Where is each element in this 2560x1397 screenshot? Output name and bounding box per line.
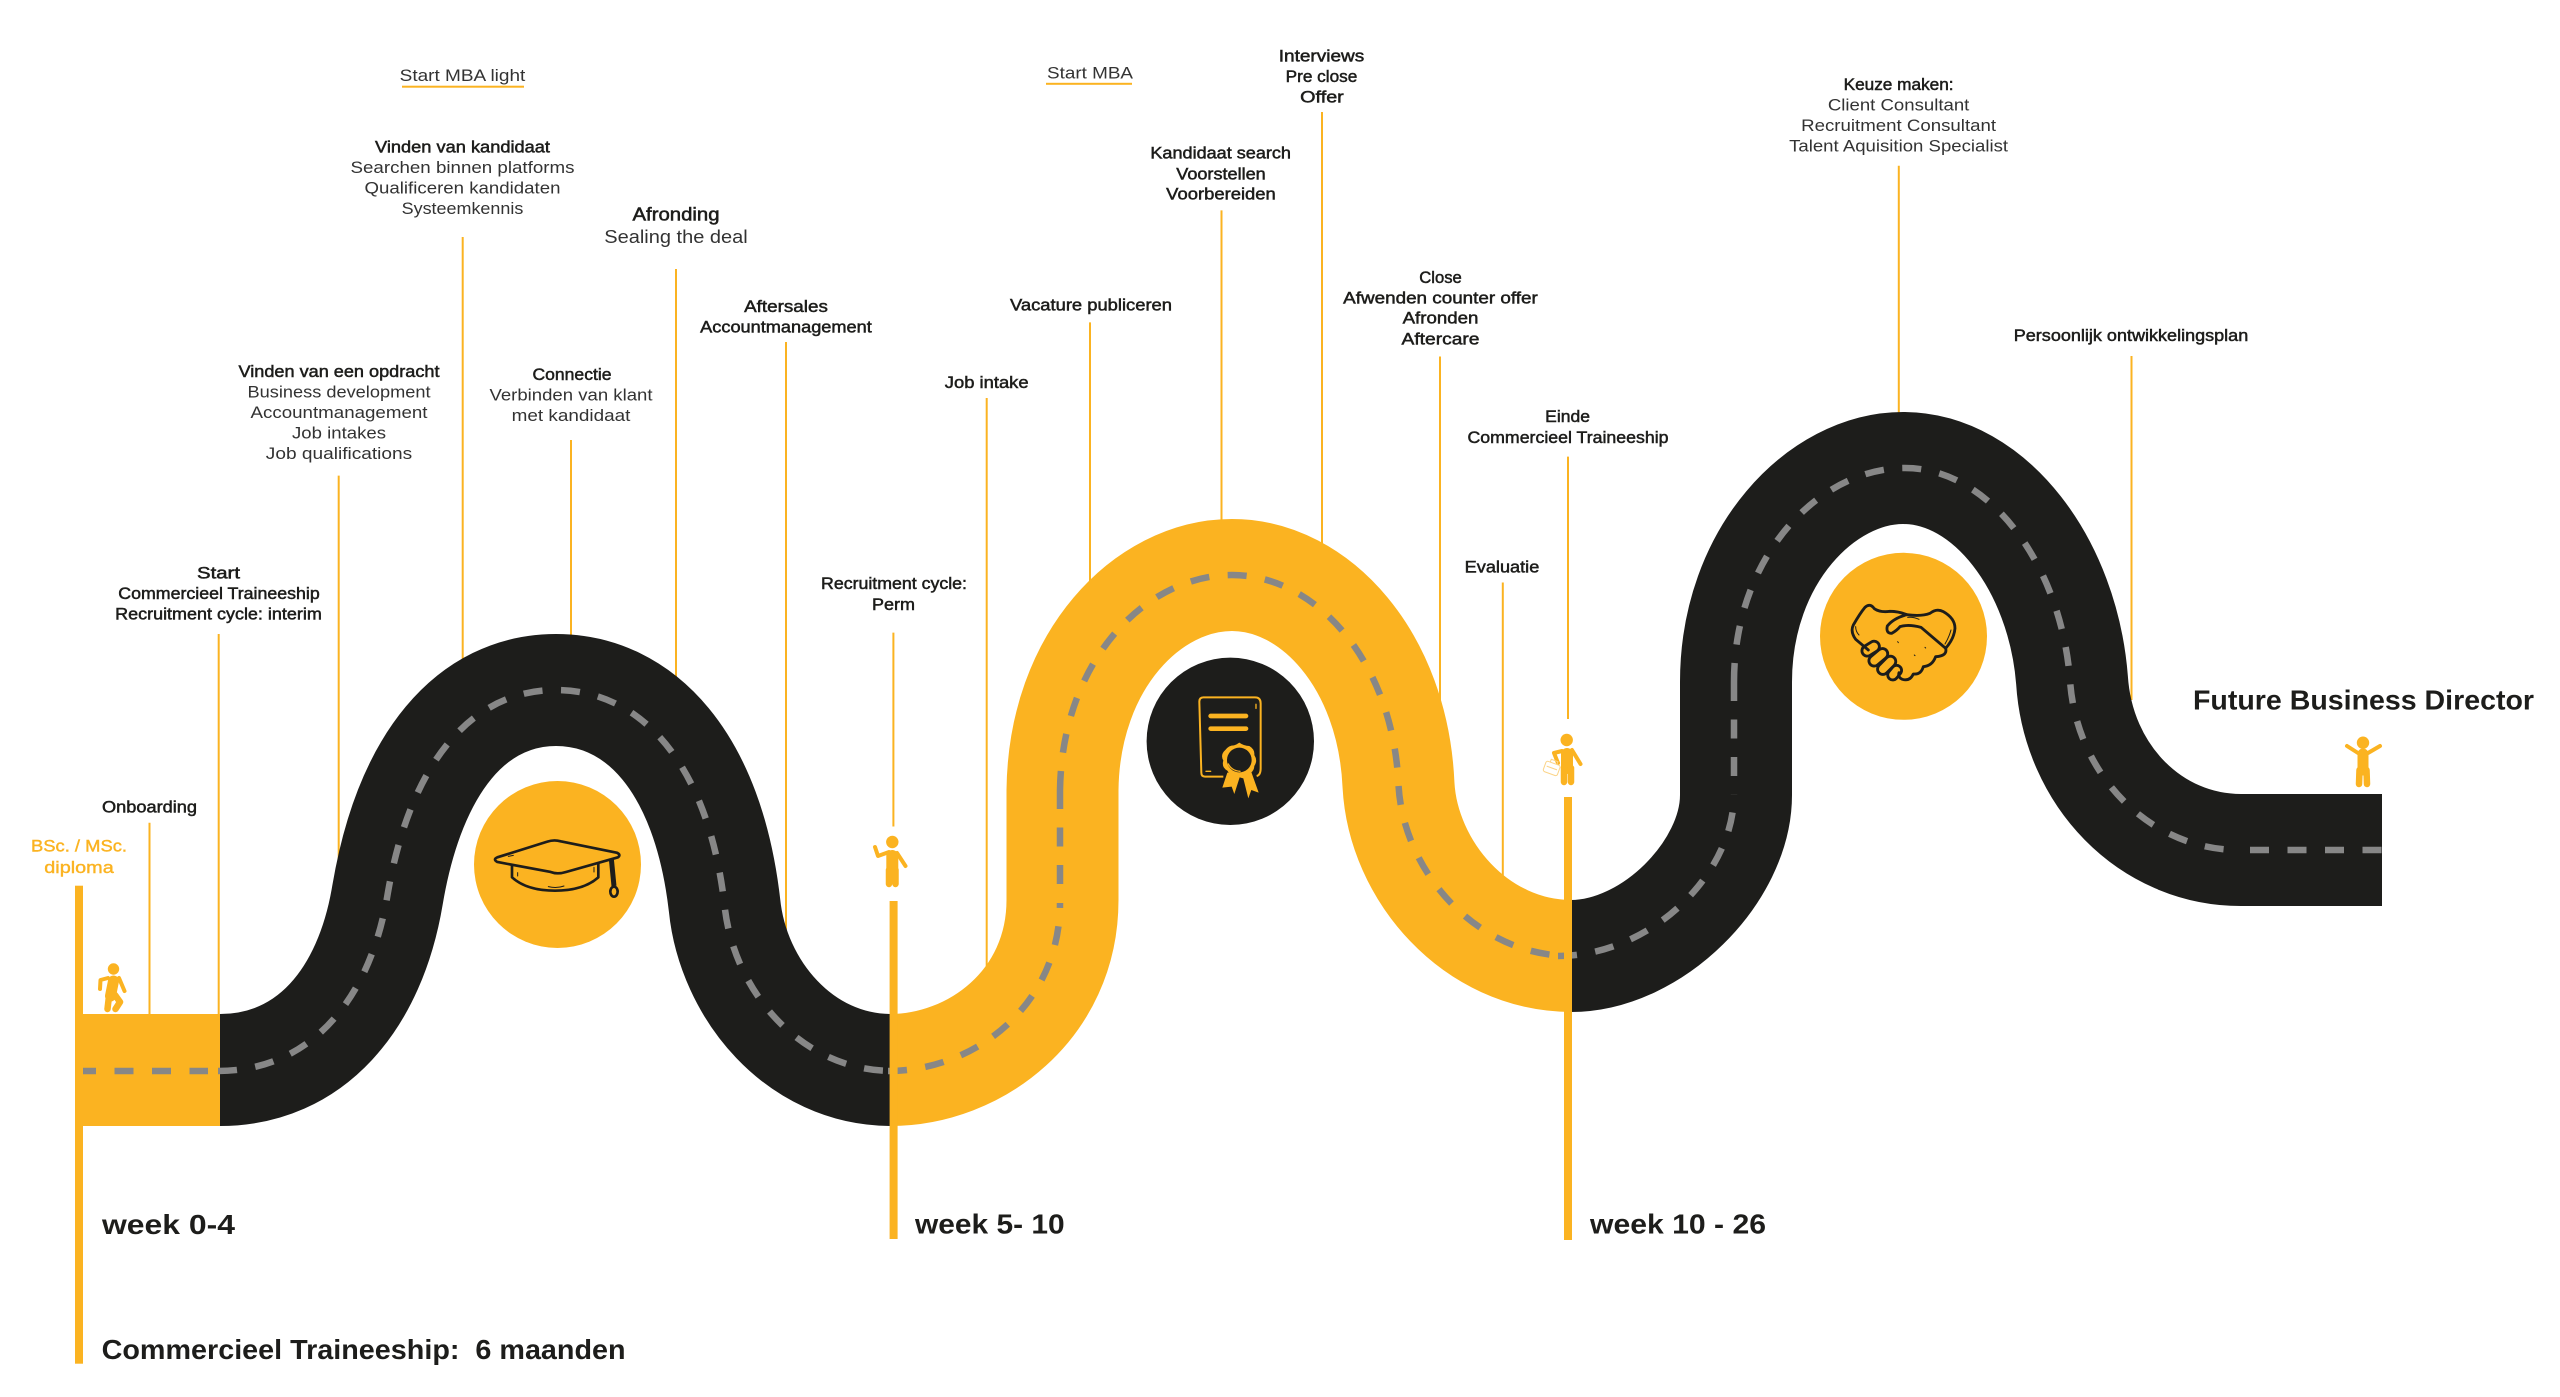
milestone bar: start of traineeship (75, 886, 83, 1364)
icon: certificate in black circle (1147, 658, 1314, 825)
milestone bar: week 5 (890, 901, 898, 1239)
callout: Connectie (490, 366, 653, 640)
callout: Aftersales: Aftersales (744, 298, 828, 316)
callout: Vacature publiceren: Vacature publiceren (1010, 297, 1172, 315)
callout: Aftersales: Accountmanagement (700, 318, 872, 336)
callout: Start MBA: Start MBA (1047, 65, 1133, 83)
callout: Keuze maken (1789, 76, 2009, 420)
callout: Vinden van kandidaat: Searchen binnen platforms (350, 159, 574, 177)
callout: Recruitment cycle Perm (821, 575, 967, 826)
icon: celebrating person (2347, 736, 2380, 784)
callout: Vinden van een opdracht: Vinden van een opdracht (238, 363, 440, 381)
label: diploma: BSc. / MSc. (31, 838, 127, 856)
callout: Afronding (604, 204, 748, 700)
callout: Interviews: Pre close (1286, 68, 1357, 86)
callout: Start MBA light: Start MBA light (400, 67, 526, 85)
milestone bar: week 10 (1564, 797, 1572, 1240)
callout: Vinden van een opdracht: Job intakes (292, 425, 386, 443)
callout: Vinden van een opdracht: Business development (248, 384, 431, 402)
callout: Recruitment cycle Perm: Perm (872, 596, 915, 614)
callout: Start Commercieel Traineeship (115, 564, 322, 1016)
callout: Einde Commercieel Traineeship: Einde (1545, 408, 1590, 426)
callout: Keuze maken: Talent Aquisition Specialist (1789, 138, 2009, 156)
callout: Einde Commercieel Traineeship: Commercieel Traineeship (1468, 429, 1668, 447)
callout: Keuze maken: Client Consultant (1828, 97, 1970, 115)
callout: Afronding: Sealing the deal (604, 226, 748, 247)
icon: graduation cap in yellow circle (474, 781, 641, 948)
callout: Interviews: Interviews (1279, 47, 1364, 65)
callout: Afronding: Afronding (632, 204, 720, 224)
heading: programme length: Commercieel Traineeship: 6 maanden (102, 1334, 626, 1365)
callout: Connectie: Verbinden van klant (490, 387, 653, 405)
callout: Interviews: Offer (1300, 88, 1344, 106)
callout: Kandidaat search: Voorbereiden (1166, 186, 1276, 204)
heading: week 0-4: week 0-4 (101, 1209, 235, 1240)
callout: Vinden van een opdracht (238, 363, 440, 870)
callout: Interviews (1279, 47, 1364, 560)
road centre dashes (77, 468, 2382, 1071)
callout: Kandidaat search: Kandidaat search (1150, 145, 1291, 163)
callout: Einde Commercieel Traineeship (1468, 408, 1668, 719)
callout: Connectie: Connectie (532, 366, 612, 384)
icon: walking person (100, 963, 124, 1009)
road section: week 10-26, black hump to finish (1571, 468, 2382, 956)
callout: Vinden van kandidaat (350, 138, 574, 680)
callout: Start Commercieel Traineeship: Commercieel Traineeship (118, 585, 320, 603)
heading: week 5-10: week 5- 10 (914, 1209, 1065, 1240)
callout: Start Commercieel Traineeship: Recruitment cycle: interim (115, 606, 322, 624)
callout: Aftersales (700, 298, 872, 950)
callout: Close: Close (1419, 269, 1462, 287)
callout: Keuze maken: Keuze maken: (1844, 76, 1954, 94)
icon: waving person (875, 836, 906, 884)
label: diploma (31, 838, 127, 877)
callout: Close (1343, 269, 1538, 710)
callout: Connectie: met kandidaat (512, 407, 631, 425)
callout: Vinden van kandidaat: Systeemkennis (402, 200, 523, 218)
callout: Vinden van kandidaat: Qualificeren kandidaten (364, 180, 560, 198)
road section: week 5-10, yellow hump (890, 575, 1572, 1070)
heading: Future Business Director: Future Business Director (2193, 684, 2534, 716)
icon: person with briefcase (1543, 734, 1580, 782)
callout: Onboarding: Onboarding (102, 798, 197, 816)
icon: handshake in yellow circle (1820, 553, 1987, 720)
callout: Vinden van een opdracht: Job qualifications (266, 445, 412, 463)
callout: Keuze maken: Recruitment Consultant (1801, 117, 1997, 135)
callout: Recruitment cycle Perm: Recruitment cycle: (821, 575, 967, 593)
callout: Close: Afwenden counter offer (1343, 290, 1538, 308)
callout: Kandidaat search (1150, 145, 1291, 525)
callout: Kandidaat search: Voorstellen (1176, 165, 1266, 183)
road section: week 0-4 start, yellow straight (75, 1014, 221, 1126)
heading: week 10-26: week 10 - 26 (1589, 1209, 1766, 1240)
callout: Close: Aftercare (1402, 330, 1480, 348)
road section: first hump, black (220, 690, 891, 1070)
callout: Vinden van kandidaat: Vinden van kandidaat (375, 138, 550, 156)
callout: Close: Afronden (1403, 310, 1478, 328)
callout: Vinden van een opdracht: Accountmanagement (250, 404, 428, 422)
callout: Job intake: Job intake (945, 374, 1029, 392)
callout: Persoonlijk ontwikkelingsplan: Persoonlijk ontwikkelingsplan (2014, 327, 2248, 345)
callout: Evaluatie: Evaluatie (1465, 558, 1539, 576)
label: diploma: diploma (44, 859, 115, 877)
callout: Start Commercieel Traineeship: Start (197, 564, 240, 582)
